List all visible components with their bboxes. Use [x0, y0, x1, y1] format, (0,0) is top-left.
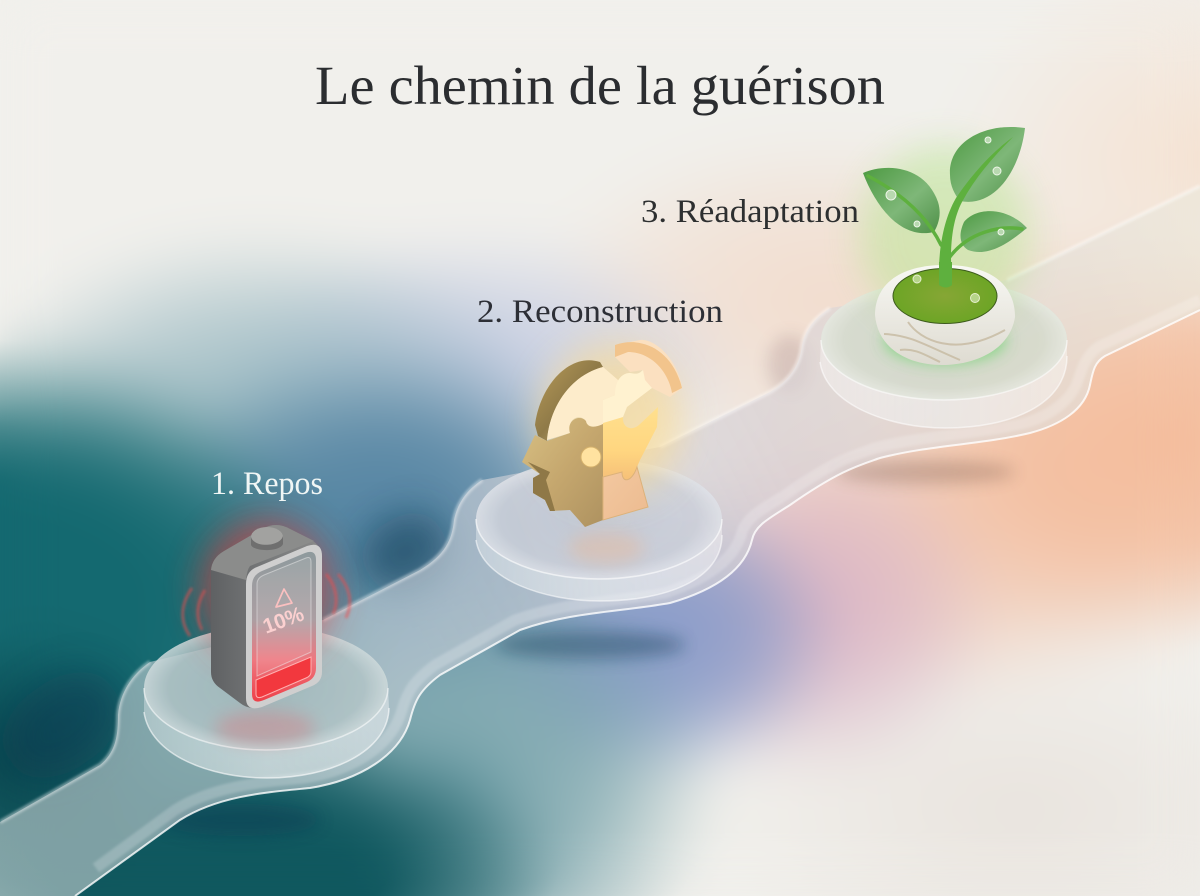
band shadows	[0, 335, 1015, 836]
icon: puzzle head	[522, 340, 682, 527]
bowl	[875, 265, 1015, 365]
leaves	[950, 127, 1025, 202]
battery percentage: 10%	[260, 602, 307, 639]
platform 3	[820, 280, 1067, 428]
icon: warning triangle	[276, 589, 292, 607]
title: Le chemin de la guérison	[315, 55, 885, 116]
stem	[939, 137, 1013, 283]
label: step 2: 2. Reconstruction	[477, 294, 723, 330]
icon: plant in marble bowl	[860, 127, 1030, 365]
water droplets	[886, 137, 1004, 235]
label: step 3: 3. Réadaptation	[641, 194, 859, 230]
platform 2	[476, 459, 722, 601]
label: step 1: 1. Repos	[211, 466, 323, 502]
icon: low battery	[183, 520, 350, 708]
platform 1	[144, 626, 389, 778]
translucent path band	[0, 186, 1200, 896]
